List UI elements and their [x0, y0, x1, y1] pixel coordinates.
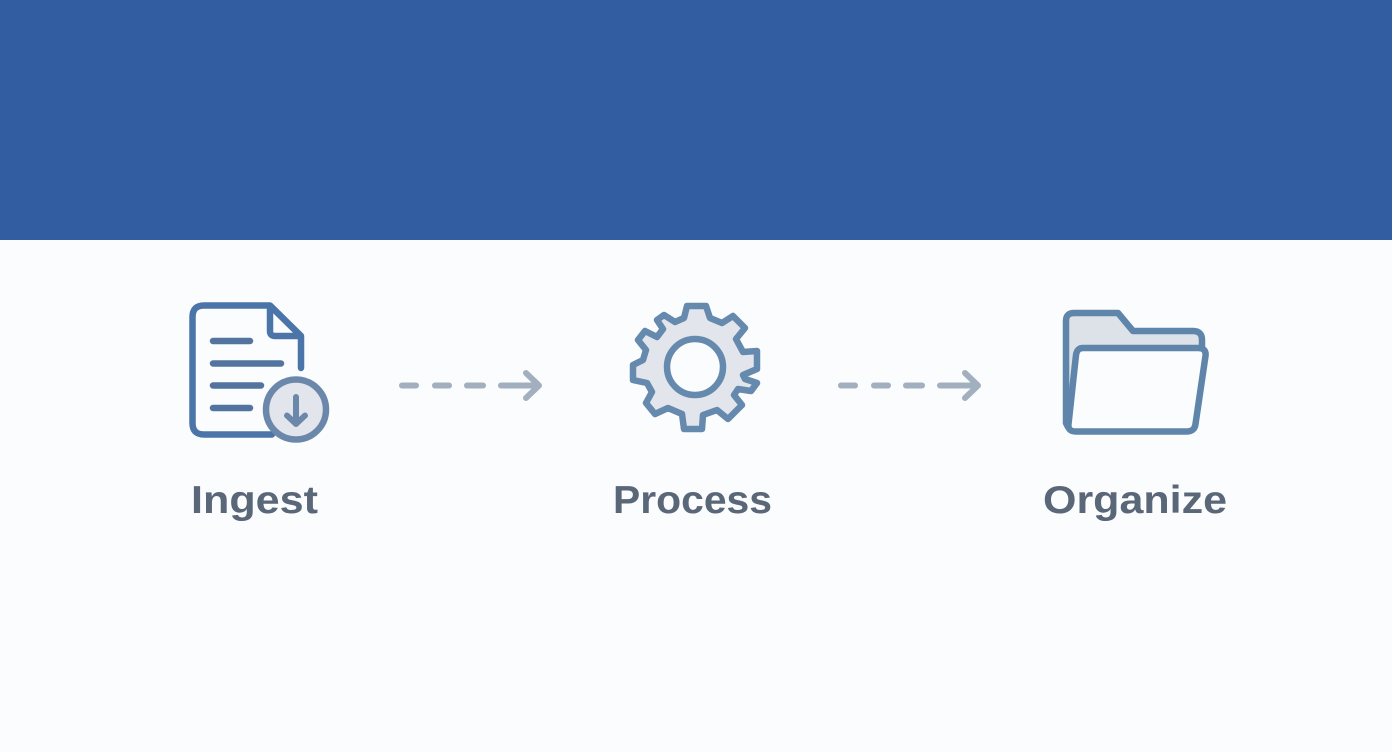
download arrow [287, 397, 305, 424]
document text lines [213, 341, 281, 408]
icon: document with download badge [192, 306, 326, 440]
step: organize [1043, 313, 1227, 522]
arrow: ingest to process [402, 373, 539, 398]
folder back [1066, 313, 1202, 427]
document outline [192, 306, 301, 434]
arrow: process to organize [841, 373, 978, 398]
label: process: Process [613, 479, 772, 522]
download badge [266, 380, 326, 440]
label: ingest: Ingest [191, 479, 318, 522]
header banner [0, 0, 1392, 240]
gear hub [667, 339, 723, 395]
label: organize: Organize [1043, 479, 1227, 522]
icon: folder [1066, 313, 1206, 432]
folder front [1068, 348, 1206, 432]
icon: gear [633, 306, 757, 429]
document fold [270, 306, 301, 336]
step: ingest [191, 306, 326, 522]
gear body [633, 306, 757, 429]
step: process [613, 306, 772, 522]
